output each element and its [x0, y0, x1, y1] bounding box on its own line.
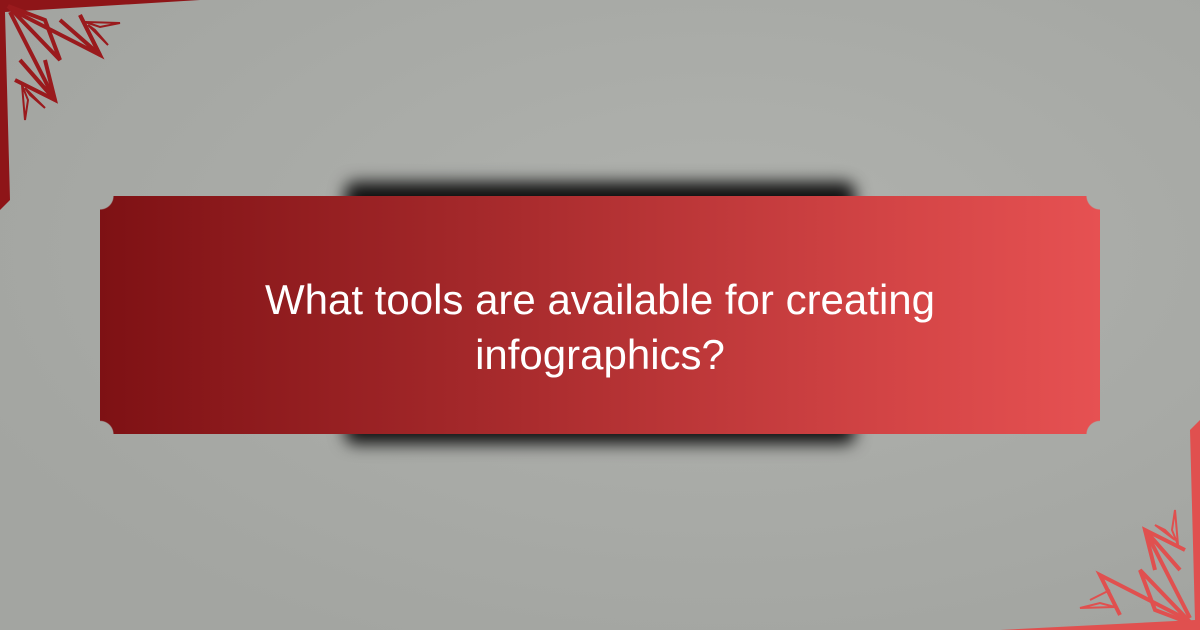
title: What tools are available for creating [265, 276, 935, 323]
banner shadow [345, 182, 855, 444]
title banner [100, 196, 1100, 434]
title: infographics? [475, 331, 725, 378]
title [265, 284, 932, 378]
